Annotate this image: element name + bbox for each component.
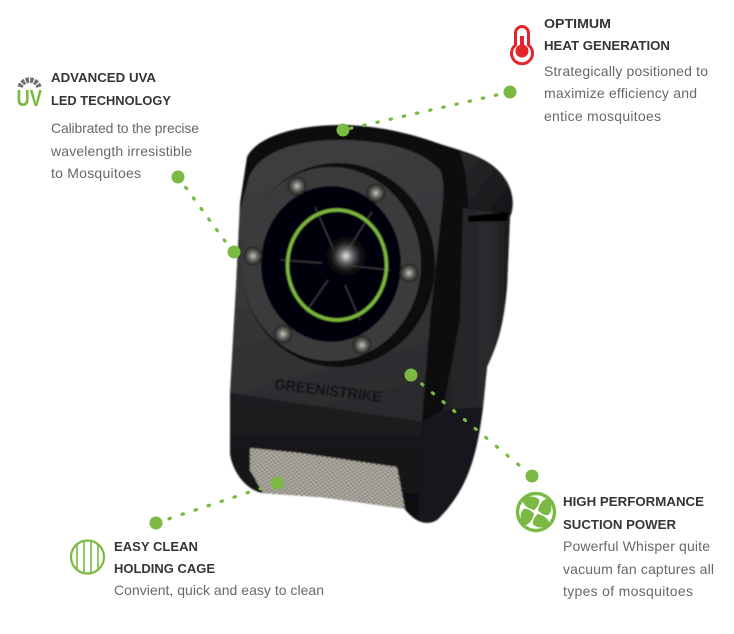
product: Green Strike device — [230, 125, 513, 523]
lens grey ring — [241, 167, 421, 361]
heading: LED TECHNOLOGY — [51, 93, 171, 108]
fan hub — [326, 236, 366, 276]
heading: EASY CLEAN — [114, 539, 198, 554]
description: types of mosquitoes — [563, 583, 693, 599]
heading: ADVANCED UVA — [51, 70, 157, 85]
description: wavelength irresistible — [50, 143, 192, 159]
feature: Optimum heat generation — [512, 16, 708, 124]
heading: HIGH PERFORMANCE — [563, 494, 704, 509]
leader: UVA LED — [172, 170, 240, 258]
leader: suction power — [404, 368, 538, 482]
description: to Mosquitoes — [51, 165, 141, 181]
feature: Easy clean holding cage — [71, 539, 324, 598]
heading: OPTIMUM — [544, 16, 611, 31]
icon: cage — [71, 540, 104, 574]
description: maximize efficiency and — [544, 85, 697, 101]
icon: thermometer — [512, 27, 533, 64]
roof of side housing — [460, 152, 513, 213]
green light ring — [288, 210, 386, 320]
description: Powerful Whisper quite — [563, 538, 710, 554]
description: Strategically positioned to — [544, 63, 708, 79]
front plate — [230, 140, 444, 422]
feature: Advanced UVA LED — [16, 70, 199, 181]
right side housing — [443, 208, 510, 410]
LED screws — [244, 177, 418, 354]
device body — [230, 125, 513, 523]
icon: fan — [518, 494, 554, 530]
lens shadow ring — [241, 163, 435, 367]
leader: heat generation — [336, 86, 516, 136]
lens black centre — [261, 186, 401, 342]
description: entice mosquitoes — [544, 108, 661, 124]
description: vacuum fan captures all — [563, 561, 714, 577]
lower side housing — [418, 407, 483, 523]
heading: SUCTION POWER — [563, 517, 677, 532]
icon: UV LED arc: UV — [16, 85, 43, 111]
holding cage mesh — [250, 448, 405, 509]
heading: HEAT GENERATION — [544, 38, 670, 53]
heading: HOLDING CAGE — [114, 561, 215, 576]
leader: holding cage — [150, 476, 284, 530]
lower band — [230, 393, 422, 517]
fan blades — [281, 207, 390, 320]
logo: GREEN/STRIKE — [274, 376, 383, 406]
feature: High performance suction — [518, 494, 714, 599]
description: Convient, quick and easy to clean — [114, 582, 324, 598]
side slot — [468, 212, 509, 222]
description: Calibrated to the precise — [51, 120, 199, 136]
